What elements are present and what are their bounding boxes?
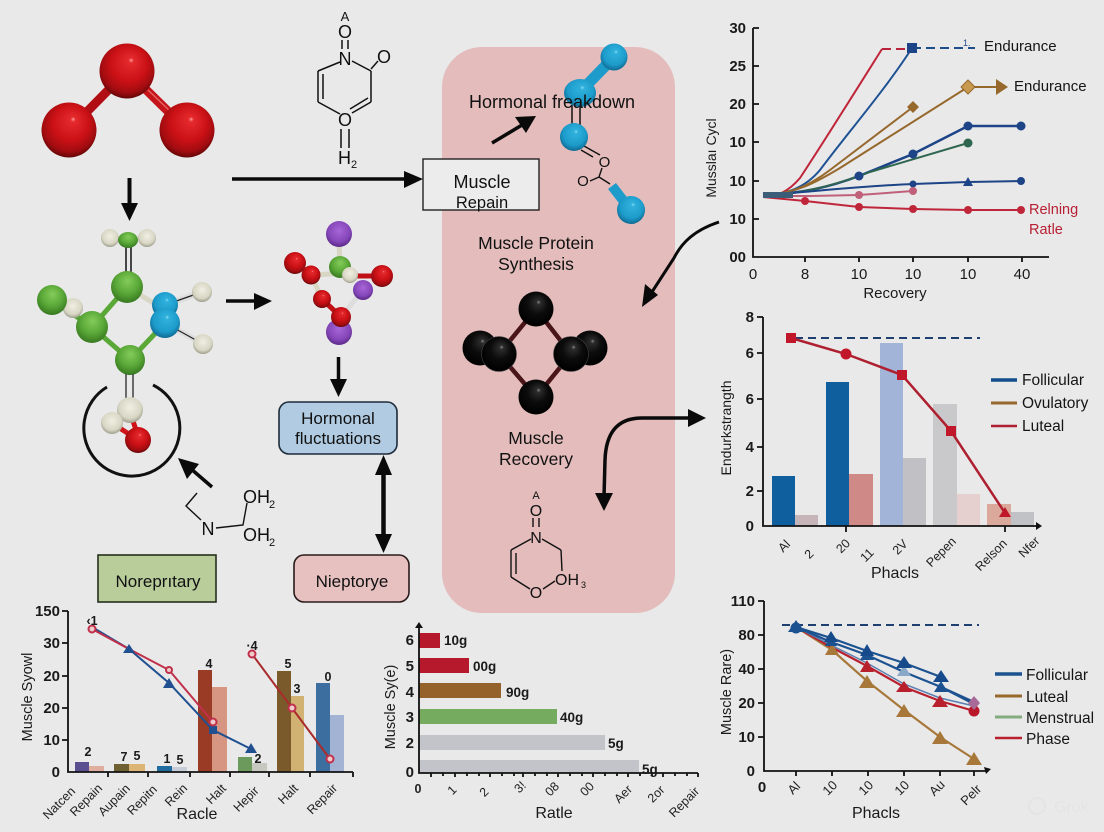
value labels: 0 [325, 670, 332, 684]
axis labels: 2 [477, 785, 492, 800]
text: muscle protein synthesis: Synthesis [498, 254, 574, 274]
text: muscle protein synthesis [478, 233, 594, 274]
chart: muscle synthesis bar and line chart: 150 [35, 603, 60, 620]
chart: muscle rates decline line chart: 0 [758, 779, 766, 796]
panel: muscle protein synthesis [442, 47, 675, 613]
chart: muscle synthesis bar and line chart: 20 [43, 668, 60, 685]
icon: black diamond molecule [462, 292, 608, 414]
value labels: 5g [642, 762, 658, 777]
chart: horizontal bar chart: 6 [406, 632, 414, 649]
chart: recovery line chart: 10 [960, 266, 976, 283]
axis labels: Repair [304, 781, 340, 817]
chart labels: Endurance [1014, 78, 1087, 95]
chart: horizontal bar chart: Ratle [535, 805, 573, 822]
label box: nieptorye [294, 555, 409, 602]
chart: recovery line chart: 10 [851, 266, 867, 283]
arrow: purple molecule to hormonal box [330, 357, 347, 397]
chart: muscle synthesis bar and line chart: 0 [52, 764, 60, 781]
arrow: curved branch to chart and down [595, 409, 706, 511]
text: muscle protein synthesis: Muscle Protein [478, 233, 594, 253]
watermark: Grok [1054, 799, 1090, 816]
bars [419, 633, 639, 773]
axis labels: Repitn [124, 782, 160, 818]
chart: horizontal bar chart: 3 [406, 709, 414, 726]
watermark [1029, 798, 1090, 816]
icon: ring arc around molecule [84, 385, 180, 476]
label box: norepritary [98, 555, 216, 602]
bars [772, 343, 1034, 526]
chart: horizontal bar chart: 0 [406, 764, 414, 781]
text: muscle recovery: Recovery [499, 449, 573, 469]
axis labels: Relson [972, 536, 1010, 574]
chart labels [963, 38, 1087, 238]
chart: muscle rates decline line chart: Muscle Rare) [719, 649, 735, 735]
value labels: 2 [85, 745, 92, 759]
chart: horizontal bar chart: Muscle Sy(e) [383, 665, 399, 749]
icon: blue molecule: O [577, 173, 589, 190]
chart: endurance strength bar and line chart: 4 [746, 439, 755, 456]
legend: Phase [1026, 731, 1070, 748]
value labels: 5 [285, 657, 292, 671]
legend: Follicular [1026, 667, 1088, 684]
chart: muscle rates decline line chart: Phacls [852, 805, 900, 822]
axis labels: Aupain [95, 781, 133, 819]
axis labels: 3! [512, 779, 529, 796]
bars [75, 670, 344, 772]
value labels: 10g [444, 633, 467, 648]
chart: muscle rates decline line chart: Al [784, 778, 803, 797]
chart: recovery line chart: 8 [801, 266, 809, 283]
icon: top ring structure: N [338, 49, 352, 69]
icon: blue molecule [560, 44, 645, 224]
chart: endurance strength bar and line chart: Endurkstrangth [718, 381, 734, 475]
chart lines [763, 48, 1021, 210]
value labels: 5g [608, 736, 624, 751]
chart: muscle rates decline line chart: 110 [731, 593, 755, 610]
chart: endurance strength bar and line chart: 0 [746, 518, 754, 535]
chart labels: Endurance [984, 38, 1057, 55]
chart: recovery line chart: 25 [729, 58, 746, 75]
legend: Luteal [1026, 689, 1068, 706]
axis labels: Pepen [923, 534, 959, 570]
value labels [444, 633, 658, 777]
axis labels: 1 [445, 783, 460, 798]
legend: Menstrual [1026, 710, 1094, 727]
icon: bottom ring structure: N [530, 530, 542, 547]
axis labels: 2 [802, 547, 817, 562]
chart: recovery line chart: Musslaı Cycl [703, 118, 719, 198]
chart: muscle rates decline line chart: 10 [738, 729, 755, 746]
icon: bottom ring structure: O [530, 503, 542, 520]
axis labels [775, 534, 1042, 574]
arrow: red molecule down [121, 178, 138, 221]
icon: N OH2 structure: OH [243, 525, 270, 545]
axis labels: Repain [67, 781, 105, 819]
value labels: 90g [506, 685, 529, 700]
arrow: up-right in panel [492, 116, 536, 143]
value labels: 00g [473, 659, 496, 674]
icon: N OH2 structure: OH [243, 487, 270, 507]
label box: muscle repair [423, 159, 539, 212]
value labels: ·4 [246, 639, 258, 653]
label box: nieptorye: Nieptorye [316, 572, 388, 591]
icon: bottom ring structure: 3 [581, 580, 586, 590]
chart: muscle rates decline line chart: Pelr [957, 781, 985, 808]
icon: N OH2 structure [186, 487, 275, 549]
axis labels [40, 781, 340, 822]
chart: horizontal bar chart: 2 [406, 735, 414, 752]
chart: horizontal bar chart: 4 [406, 684, 415, 701]
icon: top ring structure: H [338, 148, 351, 168]
label box: muscle repair: Muscle [453, 172, 511, 192]
axis labels [415, 779, 702, 820]
icon: top ring structure: A [341, 9, 350, 24]
arrow: to muscle repair [232, 171, 423, 188]
chart: horizontal bar chart: 5 [406, 658, 414, 675]
axis labels: Repair [666, 784, 702, 820]
arrow: green molecule to purple molecule [226, 293, 272, 310]
value labels: 3 [294, 682, 301, 696]
chart: recovery line chart: 00 [729, 249, 746, 266]
chart: endurance strength bar and line chart: 2 [746, 483, 754, 500]
label box: muscle repair: Repain [456, 194, 508, 212]
value labels: 40g [560, 710, 583, 725]
value labels: 5 [134, 749, 141, 763]
chart: muscle synthesis bar and line chart: Racle [177, 806, 218, 823]
axis labels: Al [775, 537, 793, 555]
axis labels: Rein [162, 781, 190, 809]
icon: N OH2 structure: N [202, 519, 214, 539]
value labels: 1 [164, 752, 171, 766]
chart: muscle rates decline line chart: 10 [891, 777, 912, 798]
icon: top ring structure [318, 9, 391, 171]
icon: N OH2 structure: 2 [269, 499, 275, 511]
chart: endurance strength bar and line chart: 8 [746, 309, 754, 326]
axis labels: 0 [415, 782, 422, 796]
chart: recovery line chart: 10 [729, 134, 746, 151]
text: muscle recovery [499, 428, 573, 469]
value labels: 7 [121, 750, 128, 764]
legend: Ovulatory [1022, 395, 1089, 412]
arrow: chart curve into panel [642, 222, 719, 307]
value labels: ‹1 [86, 614, 98, 628]
icon: bottom ring structure: OH [555, 572, 579, 589]
icon: N OH2 structure: 2 [269, 537, 275, 549]
icon: red three-atom molecule [42, 44, 214, 158]
chart: recovery line chart: 10 [905, 266, 921, 283]
icon: green and blue molecule [37, 229, 213, 453]
label box: hormonal fluctuations [279, 402, 397, 454]
icon: top ring structure: O [377, 47, 391, 67]
chart: endurance strength bar and line chart: 6 [746, 345, 754, 362]
series lines [796, 627, 974, 759]
arrow: double-headed vertical [375, 455, 392, 553]
chart: muscle rates decline line chart: 40 [738, 661, 755, 678]
label box: norepritary: Noreprıtary [115, 572, 201, 591]
chart: recovery line chart: 10 [729, 211, 746, 228]
text: hormonal freakdown: Hormonal freakdown [469, 92, 635, 112]
value labels: 4 [206, 657, 213, 671]
chart: muscle synthesis bar and line chart: 20 [43, 700, 60, 717]
chart: recovery line chart: 40 [1014, 266, 1030, 283]
icon: bottom ring structure [511, 490, 586, 602]
legend: Follicular [1022, 372, 1084, 389]
chart: muscle synthesis bar and line chart: Muscle Syowl [20, 653, 36, 741]
chart: muscle rates decline line chart [719, 593, 1094, 822]
axis labels: 20 [833, 536, 853, 556]
chart: muscle rates decline line chart: 10 [819, 777, 840, 798]
legend [995, 667, 1094, 748]
chart labels: Relning [1029, 202, 1078, 218]
icon: top ring structure: O [338, 22, 352, 42]
text: muscle recovery: Muscle [508, 428, 564, 448]
chart: recovery line chart: Recovery [863, 285, 927, 302]
chart: recovery line chart: 30 [729, 20, 746, 37]
icon: bottom ring structure: A [532, 490, 540, 502]
chart labels: Ratle [1029, 222, 1063, 238]
value labels: 5 [177, 753, 184, 767]
chart markers [801, 43, 1026, 214]
icon: bottom ring structure: O [530, 585, 542, 602]
arrow: structure to ring [178, 458, 212, 487]
icon: top ring structure: O [338, 110, 352, 130]
chart: recovery line chart: 0 [749, 266, 757, 283]
chart: muscle rates decline line chart: 10 [855, 777, 876, 798]
axis labels: 2or [645, 783, 668, 806]
axis labels: Halt [275, 781, 301, 807]
chart: horizontal bar chart [383, 622, 702, 822]
chart: recovery line chart: 20 [729, 96, 746, 113]
chart: muscle rates decline line chart: 20 [738, 695, 755, 712]
value labels [85, 614, 332, 767]
chart: recovery line chart: 10 [729, 173, 746, 190]
icon: top ring structure: 2 [351, 159, 357, 171]
chart: endurance strength bar and line chart: 6 [746, 391, 754, 408]
chart: muscle rates decline line chart: Au [926, 777, 948, 799]
chart: muscle synthesis bar and line chart: 30 [43, 635, 60, 652]
chart: muscle rates decline line chart: 80 [738, 627, 755, 644]
chart: muscle synthesis bar and line chart: 10 [43, 732, 60, 749]
chart labels: 1. [963, 38, 971, 48]
axis labels: Nfer [1016, 534, 1042, 560]
axis labels: Hepir [231, 784, 262, 815]
value labels: 2 [255, 752, 262, 766]
lines [88, 626, 334, 762]
legend [991, 372, 1089, 435]
axis labels: 11 [858, 546, 877, 565]
axis labels: Halt [203, 781, 229, 807]
chart: endurance strength bar and line chart [718, 309, 1089, 582]
chart: endurance strength bar and line chart: Phacls [871, 565, 919, 582]
legend: Luteal [1022, 418, 1064, 435]
series markers [788, 620, 982, 765]
axis labels: 00 [577, 779, 597, 799]
icon: blue molecule: O [599, 154, 610, 171]
chart: recovery line chart [703, 20, 1087, 302]
icon: purple and red molecule [284, 221, 393, 345]
axis labels: 2V [890, 536, 911, 558]
chart: muscle synthesis bar and line chart [20, 603, 353, 823]
label box: hormonal fluctuations: Hormonal [301, 409, 375, 428]
chart: muscle rates decline line chart: 0 [747, 763, 755, 780]
axis labels: Natcen [40, 784, 78, 822]
axis labels: Aer [611, 782, 635, 806]
axis labels: 08 [542, 779, 562, 799]
label box: hormonal fluctuations: fluctuations [295, 429, 381, 448]
